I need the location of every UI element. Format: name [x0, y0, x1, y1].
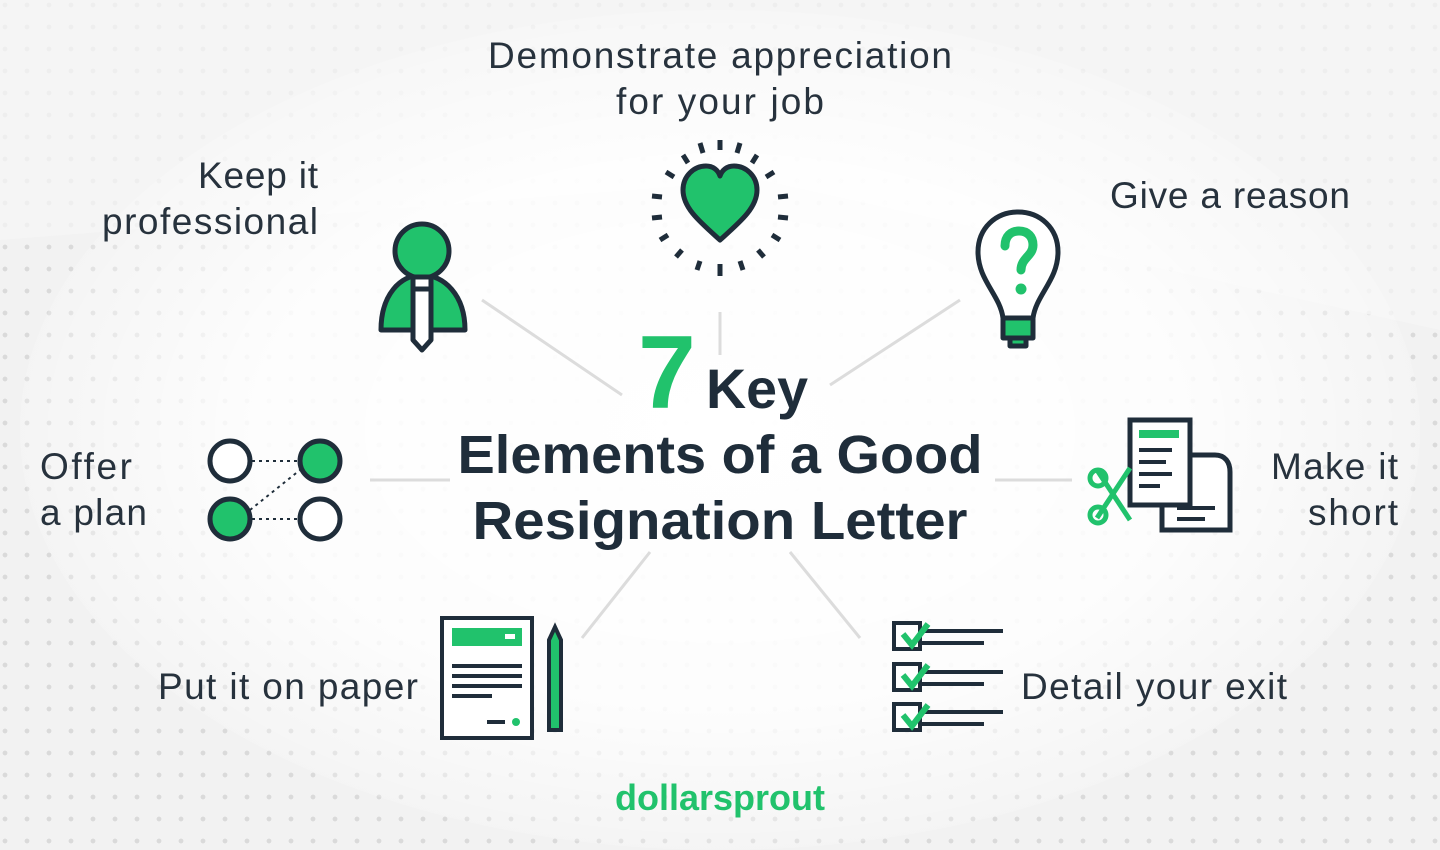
label: offer a plan: Offer — [40, 446, 132, 487]
logo: dollarsprout — [615, 777, 825, 818]
label: make it short: short — [1308, 492, 1399, 533]
title: Key — [706, 357, 808, 420]
label: keep it professional: professional — [102, 201, 318, 242]
icon: checklist — [894, 623, 1003, 730]
label: offer a plan — [40, 446, 147, 533]
title: Resignation Letter — [472, 491, 968, 551]
icon: heart with rays — [652, 140, 788, 276]
label: keep it professional — [102, 155, 319, 242]
label: keep it professional: Keep it — [198, 155, 319, 196]
label: give a reason: Give a reason — [1110, 175, 1350, 216]
label: appreciation — [488, 35, 952, 122]
icon: paper and pencil — [442, 618, 561, 738]
label: put it on paper: Put it on paper — [158, 666, 418, 707]
label: appreciation: for your job — [616, 81, 824, 122]
label: make it short: Make it — [1271, 446, 1399, 487]
title: Elements of a Good — [458, 425, 982, 485]
label: make it short — [1271, 446, 1399, 533]
icon: lightbulb — [978, 212, 1058, 346]
title — [458, 315, 982, 551]
label: detail your exit: Detail your exit — [1021, 666, 1288, 707]
icon: person — [381, 224, 465, 350]
icon: make it short — [1090, 420, 1230, 530]
label: offer a plan: a plan — [40, 492, 147, 533]
connector lines — [370, 300, 1072, 638]
icon: offer plan nodes — [210, 441, 340, 539]
label: appreciation: Demonstrate appreciation — [488, 35, 952, 76]
title: 7 — [638, 315, 696, 431]
